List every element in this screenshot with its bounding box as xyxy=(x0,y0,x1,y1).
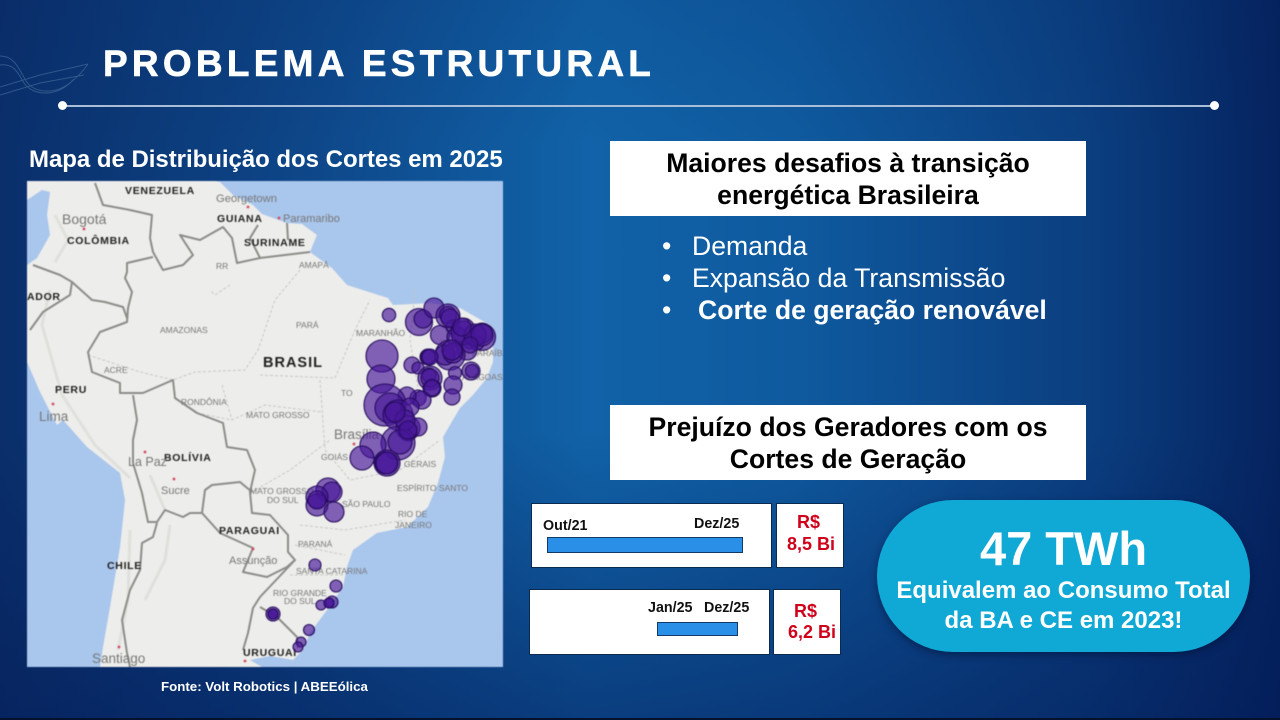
map of curtailment distribution: MARANHÃO xyxy=(356,328,406,338)
relief texture xyxy=(42,215,170,650)
map of curtailment distribution: AMAPÁ xyxy=(299,260,329,270)
challenges list: • xyxy=(662,295,671,325)
map of curtailment distribution: RONDÔNIA xyxy=(181,397,227,407)
timeline bar: Jan/25 to Dez/25: Jan/25 xyxy=(648,600,693,616)
map of curtailment distribution: ALAGOAS xyxy=(462,372,503,382)
capital dots xyxy=(52,206,355,662)
map of curtailment distribution: RIO DE xyxy=(398,509,428,519)
map of curtailment distribution: Bogotá xyxy=(62,211,107,227)
map of curtailment distribution: Paramaribo xyxy=(283,213,340,225)
map of curtailment distribution: Georgetown xyxy=(216,193,277,205)
value box: R$ 6,2 Bi: R$ xyxy=(794,601,817,621)
map of curtailment distribution: GOIÁS xyxy=(321,452,348,462)
curtailment bubbles xyxy=(266,298,496,652)
Atlantic ocean xyxy=(215,181,503,667)
timeline bar: Out/21 to Dez/25: Dez/25 xyxy=(694,516,739,532)
callout: 47 TWh xyxy=(877,500,1250,652)
map labels: GUIANA xyxy=(217,213,263,225)
map of curtailment distribution: RIO GRANDE xyxy=(273,588,327,598)
frame edges xyxy=(0,718,1280,720)
map of curtailment distribution: PARANÁ xyxy=(298,539,333,549)
map of curtailment distribution: TO xyxy=(341,388,353,398)
decorative logo waves xyxy=(0,56,88,96)
map source note: Fonte: Volt Robotics | ABEEólica xyxy=(161,679,368,694)
title: PROBLEMA ESTRUTURAL xyxy=(103,43,655,84)
map of curtailment distribution: SÃO PAULO xyxy=(342,499,391,509)
map of curtailment distribution: DO SUL xyxy=(284,596,316,606)
map labels: PERU xyxy=(55,384,87,396)
map labels: BOLÍVIA xyxy=(164,451,212,464)
map labels: SURINAME xyxy=(244,237,306,249)
map labels xyxy=(27,185,323,659)
title divider with end dots xyxy=(58,101,1219,110)
map labels: URUGUAI xyxy=(243,647,297,659)
map of curtailment distribution: RR xyxy=(216,261,228,271)
value box: R$ 6,2 Bi: 6,2 Bi xyxy=(788,622,836,642)
timeline bar: Jan/25 to Dez/25: Dez/25 xyxy=(704,600,749,616)
country borders xyxy=(30,183,310,667)
map of curtailment distribution: Sucre xyxy=(161,485,190,497)
challenges list: Demanda xyxy=(692,231,807,261)
map labels: COLÔMBIA xyxy=(67,234,130,247)
map of curtailment distribution: PARÁ xyxy=(296,320,319,330)
map of curtailment distribution: ACRE xyxy=(104,365,128,375)
map of curtailment distribution xyxy=(26,180,504,668)
map heading: Mapa de Distribuição dos Cortes em 2025 xyxy=(29,146,503,173)
timeline bar: Jan/25 to Dez/25 xyxy=(529,589,770,655)
value box: R$ 8,5 Bi: R$ xyxy=(797,512,820,532)
challenges list: • xyxy=(662,231,671,261)
heading box: challenges xyxy=(610,141,1086,216)
heading box: losses xyxy=(610,405,1086,480)
map of curtailment distribution: Assunção xyxy=(229,555,277,567)
map of curtailment distribution: GERAIS xyxy=(404,459,436,469)
map labels: PARAGUAI xyxy=(219,525,280,537)
heading box: losses: Prejuízo dos Geradores com os xyxy=(648,412,1048,442)
map of curtailment distribution: MATO GROSSO xyxy=(246,410,310,420)
map labels: CHILE xyxy=(107,560,142,572)
value box: R$ 8,5 Bi xyxy=(776,503,844,568)
challenges list xyxy=(662,231,1047,325)
state borders xyxy=(88,270,490,575)
challenges list: Corte de geração renovável xyxy=(698,295,1047,325)
map of curtailment distribution: AMAZONAS xyxy=(160,325,208,335)
map labels: VENEZUELA xyxy=(125,185,195,197)
challenges list: Expansão da Transmissão xyxy=(692,263,1005,293)
value box: R$ 8,5 Bi: 8,5 Bi xyxy=(787,534,835,554)
value box: R$ 6,2 Bi xyxy=(773,589,841,655)
map of curtailment distribution: DO SUL xyxy=(267,495,299,505)
map of curtailment distribution: Brasília xyxy=(334,427,380,442)
callout: 47 TWh: 47 TWh xyxy=(980,522,1147,575)
heading box: challenges: energética Brasileira xyxy=(717,180,979,210)
Pacific ocean xyxy=(27,190,50,265)
map of curtailment distribution: Santiago xyxy=(92,651,145,666)
map of curtailment distribution: SANTA CATARINA xyxy=(296,566,368,576)
timeline bar: Out/21 to Dez/25: Out/21 xyxy=(543,518,588,534)
callout: 47 TWh: Equivalem ao Consumo Total xyxy=(896,577,1231,604)
map of curtailment distribution: Lima xyxy=(39,409,69,424)
map of curtailment distribution: ESPÍRITO SANTO xyxy=(397,483,468,493)
map labels: BRASIL xyxy=(263,355,323,371)
map of curtailment distribution: JANEIRO xyxy=(395,520,432,530)
map labels: ADOR xyxy=(27,291,61,303)
heading box: challenges: Maiores desafios à transição xyxy=(666,148,1030,178)
map of curtailment distribution: MATO GROSSO xyxy=(250,486,314,496)
callout: 47 TWh: da BA e CE em 2023! xyxy=(945,607,1182,634)
heading box: losses: Cortes de Geração xyxy=(730,444,966,474)
challenges list: • xyxy=(662,263,671,293)
timeline bar: Out/21 to Dez/25 xyxy=(531,503,772,568)
map of curtailment distribution: La Paz xyxy=(128,455,167,469)
